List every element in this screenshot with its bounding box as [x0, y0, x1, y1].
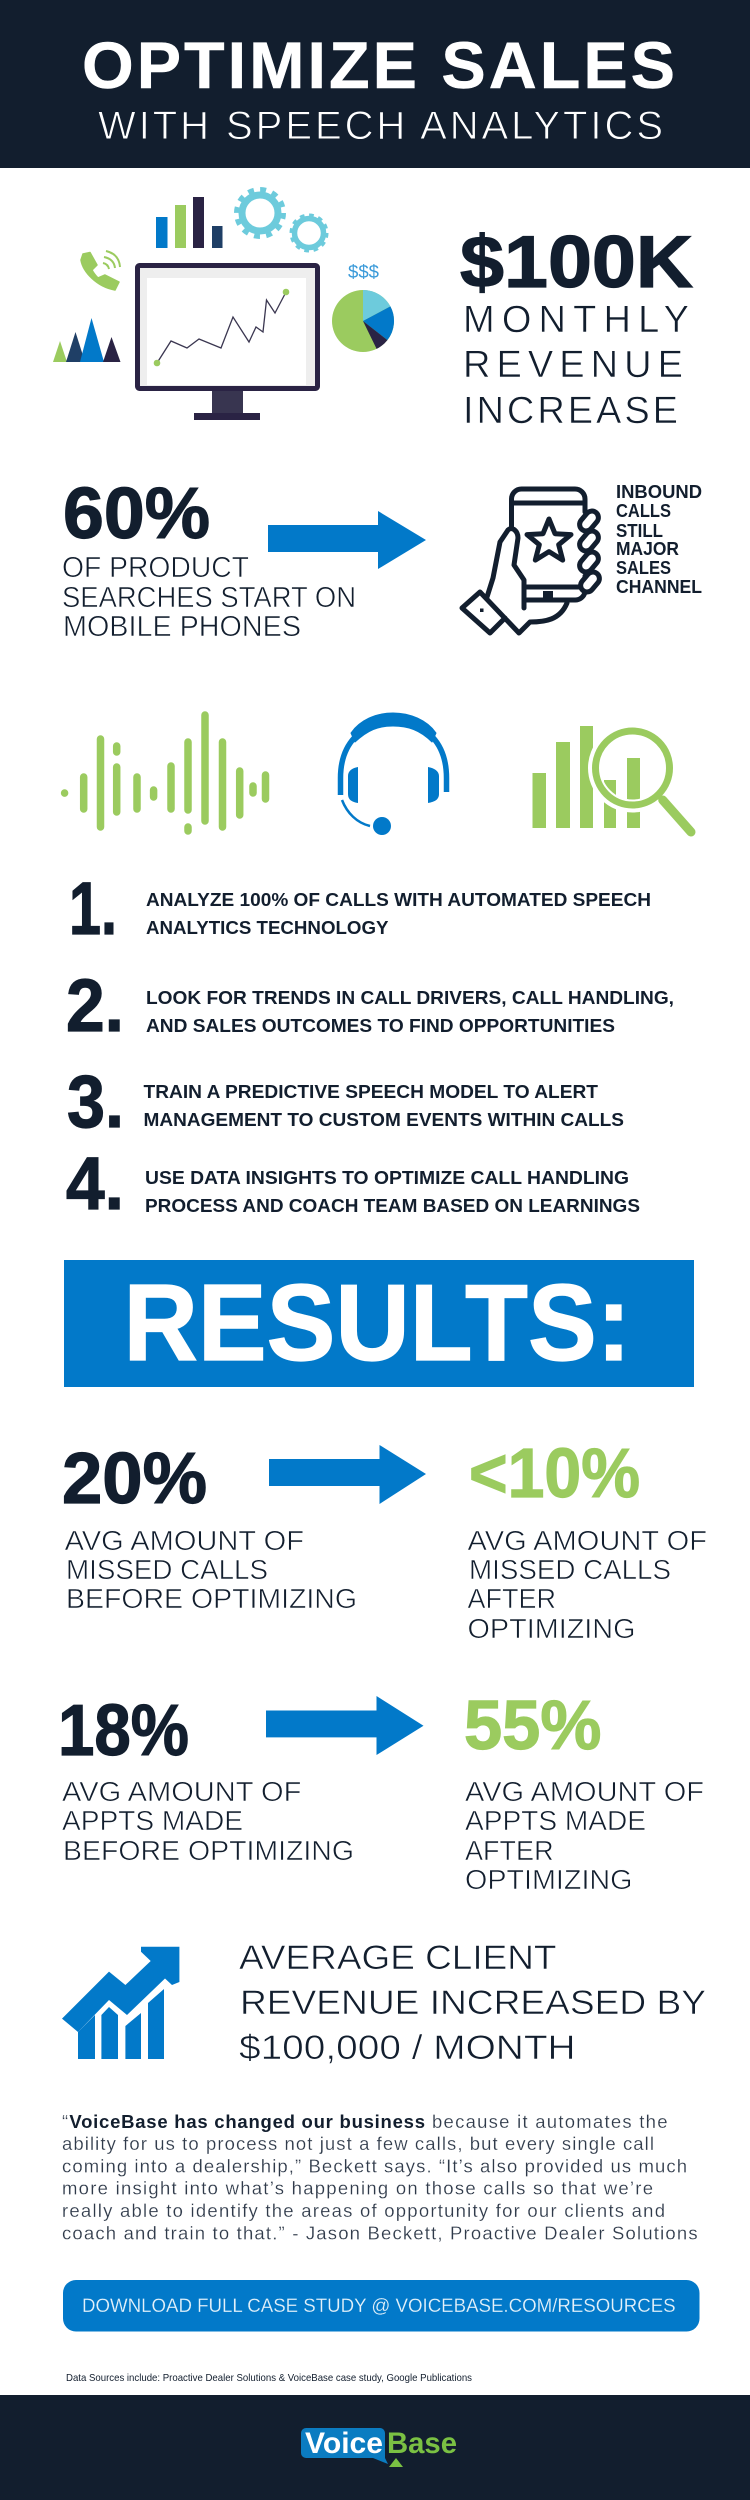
label: inbound calls: MAJOR — [616, 539, 679, 559]
stat: mobile searches: SEARCHES START ON — [62, 582, 356, 614]
arrow — [268, 511, 426, 569]
stat: monthly revenue: MONTHLY — [463, 299, 689, 341]
icon: pie chart — [332, 290, 394, 352]
logo — [301, 2427, 457, 2467]
result: missed calls before — [62, 1439, 357, 1614]
step 3: TRAIN A PREDICTIVE SPEECH MODEL TO ALERT — [144, 1082, 598, 1102]
label: inbound calls: STILL — [616, 521, 663, 541]
result: appointments after: OPTIMIZING — [465, 1864, 632, 1895]
stat: monthly revenue: INCREASE — [463, 390, 678, 432]
icon: phone call — [81, 251, 120, 290]
result: missed calls before: MISSED CALLS — [66, 1554, 268, 1585]
revenue statement: $100,000 / MONTH — [239, 2029, 576, 2067]
icon: bar chart — [156, 197, 222, 248]
step 2: 2. — [66, 964, 124, 1047]
subtitle: WITH SPEECH ANALYTICS — [98, 104, 663, 148]
testimonial quote: coach and train to that.” - Jason Beckett, Proactive Dealer Solutions — [62, 2222, 698, 2244]
result: missed calls before: 20% — [62, 1439, 207, 1519]
icon: hand holding phone — [462, 489, 602, 633]
icon: rising chart — [62, 1947, 179, 2059]
step 3: 3. — [67, 1060, 124, 1143]
revenue statement: REVENUE INCREASED BY — [240, 1984, 706, 2022]
step 2: LOOK FOR TRENDS IN CALL DRIVERS, CALL HANDLING, — [146, 988, 674, 1008]
step 3: MANAGEMENT TO CUSTOM EVENTS WITHIN CALLS — [144, 1110, 624, 1130]
data sources note: Data Sources include: Proactive Dealer Solutions & VoiceBase case study, Google Publications — [66, 2372, 472, 2384]
testimonial quote — [62, 2111, 698, 2244]
icon: bars and magnifier — [532, 726, 691, 832]
step 1: ANALYTICS TECHNOLOGY — [146, 918, 388, 938]
step 3 — [67, 1060, 624, 1143]
step 4 — [66, 1142, 640, 1225]
icon: mountains — [53, 318, 120, 362]
stat: mobile searches: MOBILE PHONES — [63, 611, 301, 643]
label: inbound calls: INBOUND — [616, 482, 702, 502]
label: inbound calls: CHANNEL — [616, 577, 702, 597]
testimonial quote: “ — [62, 2111, 68, 2132]
testimonial quote: VoiceBase has changed our business — [69, 2111, 425, 2132]
icon: sound waveform — [65, 715, 265, 831]
result: appointments before: AVG AMOUNT OF — [62, 1776, 301, 1807]
result: appointments after: AVG AMOUNT OF — [465, 1776, 704, 1807]
header banner — [0, 0, 750, 168]
step 1: 1. — [69, 867, 117, 950]
result: appointments before: APPTS MADE — [62, 1805, 243, 1836]
icon: headset — [340, 713, 446, 835]
arrow — [269, 1445, 426, 1504]
icon: gears — [236, 190, 326, 250]
result: missed calls after: OPTIMIZING — [468, 1613, 636, 1644]
result: missed calls before: BEFORE OPTIMIZING — [66, 1583, 357, 1614]
step 2: AND SALES OUTCOMES TO FIND OPPORTUNITIES — [146, 1016, 615, 1036]
footer — [0, 2395, 750, 2500]
step 1 — [69, 867, 651, 950]
result: missed calls after: AVG AMOUNT OF — [468, 1525, 707, 1556]
logo: Base — [387, 2427, 457, 2460]
result: appointments after: APPTS MADE — [465, 1805, 646, 1836]
result: missed calls after: MISSED CALLS — [469, 1554, 671, 1585]
testimonial quote: more insight into what’s happening on those calls so that we’re — [62, 2178, 653, 2199]
testimonial quote: really able to identify the areas of opportunity for our clients and — [62, 2200, 665, 2221]
testimonial quote: because it automates the — [432, 2111, 668, 2132]
testimonial quote: ability for us to process not just a few calls, but every single call — [62, 2133, 654, 2154]
results banner: RESULTS: — [124, 1262, 631, 1384]
result: missed calls after: <10% — [469, 1434, 640, 1512]
illustration: monitor with analytics icons — [53, 190, 394, 420]
result: appointments after: AFTER — [465, 1835, 554, 1866]
stat: mobile searches — [62, 474, 356, 643]
arrow — [266, 1696, 424, 1755]
label: inbound calls: SALES — [616, 558, 671, 578]
icon: monitor — [138, 266, 318, 420]
stat: mobile searches: 60% — [63, 474, 210, 554]
logo: Voice — [305, 2427, 383, 2460]
testimonial quote: coming into a dealership,” Beckett says. “It’s also provided us much — [62, 2156, 687, 2176]
call to action button: DOWNLOAD FULL CASE STUDY @ VOICEBASE.COM/RESOURCES — [82, 2295, 676, 2317]
dollar signs label: $$$ — [348, 262, 379, 282]
call to action button — [63, 2280, 700, 2332]
revenue statement — [239, 1939, 706, 2067]
step 4: USE DATA INSIGHTS TO OPTIMIZE CALL HANDLING — [145, 1168, 629, 1188]
result: appointments after: 55% — [464, 1686, 601, 1764]
step 4: PROCESS AND COACH TEAM BASED ON LEARNINGS — [145, 1196, 640, 1216]
stat: monthly revenue — [460, 222, 693, 432]
label: inbound calls: CALLS — [616, 501, 671, 521]
label: inbound calls — [616, 482, 702, 597]
step 2 — [66, 964, 674, 1047]
result: appointments before: 18% — [58, 1691, 189, 1771]
result: missed calls after — [468, 1434, 707, 1644]
stat: monthly revenue: REVENUE — [463, 344, 683, 386]
result: appointments after — [464, 1686, 704, 1895]
result: missed calls before: AVG AMOUNT OF — [65, 1525, 304, 1556]
stat: mobile searches: OF PRODUCT — [62, 552, 249, 584]
result: appointments before: BEFORE OPTIMIZING — [63, 1835, 354, 1866]
result: appointments before — [58, 1691, 354, 1866]
step 1: ANALYZE 100% OF CALLS WITH AUTOMATED SPEECH — [146, 890, 651, 910]
revenue statement: AVERAGE CLIENT — [239, 1939, 556, 1977]
title: OPTIMIZE SALES — [82, 28, 678, 102]
result: missed calls after: AFTER — [468, 1583, 556, 1614]
stat: monthly revenue: $100K — [460, 222, 693, 303]
step 4: 4. — [66, 1142, 124, 1225]
